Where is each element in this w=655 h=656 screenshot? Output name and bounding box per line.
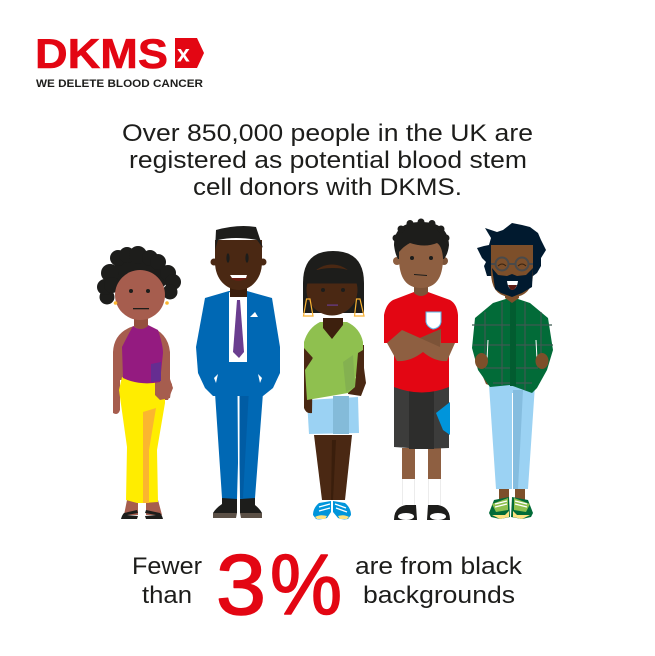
statistic: fewer than 3%: [132, 538, 523, 633]
caption: are from black backgrounds: are from black: [355, 553, 523, 580]
headline text: Over 850,000 people in the UK are: [122, 120, 533, 147]
person 1: woman in purple top and yellow trousers: [97, 246, 181, 519]
headline text: cell donors with DKMS.: [193, 174, 462, 201]
big percentage: [216, 538, 342, 633]
big percentage: %: [270, 538, 342, 633]
DKMS logo: WE DELETE BLOOD CANCER: [36, 78, 203, 90]
person 3: woman in green top and blue skirt: [303, 251, 366, 519]
DKMS logo: [35, 30, 204, 90]
headline text: registered as potential blood stem: [129, 147, 527, 174]
headline text: [122, 120, 533, 201]
caption: fewer than: than: [142, 582, 192, 609]
caption: are from black backgrounds: [355, 553, 523, 609]
caption: are from black backgrounds: backgrounds: [363, 582, 515, 609]
person 2: man in blue suit: [196, 226, 280, 518]
caption: fewer than: Fewer: [132, 553, 202, 580]
DKMS logo: x: [177, 40, 190, 66]
person 4: man in red shirt with crossed arms: [384, 218, 458, 520]
person 5: man with curly hair, glasses and plaid shirt: [472, 223, 553, 519]
DKMS logo: DKMS: [35, 30, 168, 77]
big percentage: 3: [216, 538, 266, 633]
caption: fewer than: [132, 553, 202, 609]
